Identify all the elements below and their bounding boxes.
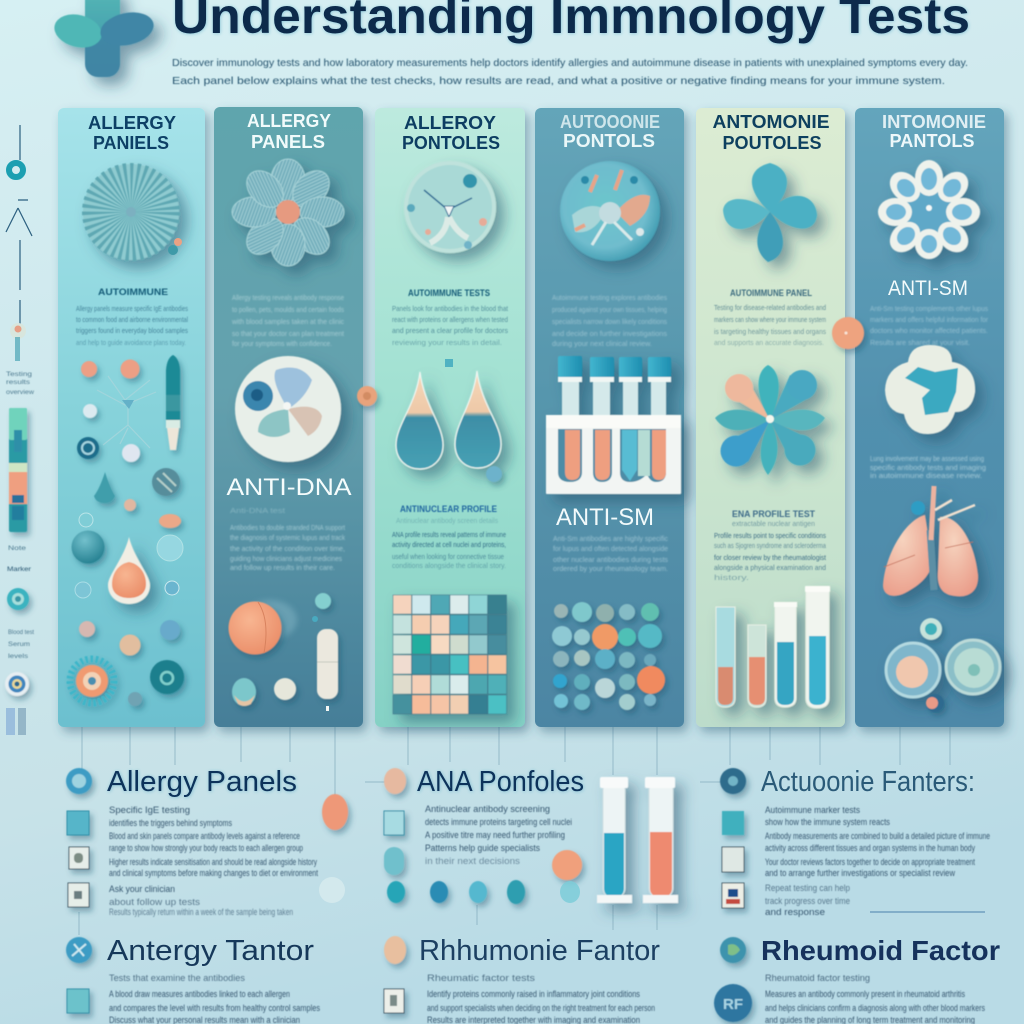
margin notes: Testing (6, 372, 32, 378)
ANA text: Antinuclear antibody screen details (396, 516, 498, 525)
icon tile (67, 989, 89, 1013)
icon tile (384, 989, 404, 1013)
description text: produced against your own tissues, helping (552, 305, 667, 314)
description text (392, 288, 509, 347)
text lines: Identify proteins commonly raised in inflammatory joint conditions (427, 989, 640, 999)
heading: Rheumoid Factor (761, 935, 1000, 966)
text lines: A blood draw measures antibodies linked to each allergen (109, 989, 290, 999)
section: antergy tantor (66, 935, 320, 1024)
description text: reviewing your results in detail. (392, 338, 502, 347)
logo: medical cross (51, 0, 157, 77)
description text: Anti-Sm testing complements other lupus (870, 304, 988, 313)
heading: ANA Ponfoles (417, 766, 584, 798)
text lines: and to arrange further investigations or specialist review (765, 868, 955, 878)
text lines: range to show how strongly your body reacts to each allergen group (109, 843, 303, 853)
icon: small pale cell (920, 618, 942, 640)
heading: PONTOLS (563, 131, 655, 151)
margin notes: overview (6, 390, 35, 396)
margin notes: Note (8, 546, 27, 552)
icon: peach-centred cell (886, 643, 940, 697)
anti-Sm text (553, 534, 668, 573)
marker text: history. (714, 573, 749, 582)
marker text (714, 509, 827, 582)
anti-Sm text: Anti-Sm antibodies are highly specific (553, 534, 668, 543)
icon (66, 937, 92, 963)
organ text (870, 454, 986, 480)
description text: Results are shared at your visit. (870, 338, 970, 347)
orange pill (552, 850, 582, 880)
heading: INTOMONIE (882, 112, 986, 132)
description text: react with proteins or allergens when tested (392, 315, 508, 324)
text lines: Blood and skin panels compare antibody levels against a reference (109, 831, 300, 841)
heading: Rhhumonie Fantor (419, 935, 660, 967)
anti-DNA label: ANTI-DNA (226, 474, 352, 501)
faint bubble (319, 877, 345, 903)
margin notes (6, 372, 35, 660)
anti-DNA text: and follow up results in their care. (230, 563, 335, 572)
intro text block: Each panel below explains what the test checks, how results are read, and what a positive or negative finding means for your immune system. (172, 75, 945, 87)
anti-Sm label: ANTI-SM (888, 277, 968, 300)
marker text: ENA PROFILE TEST (732, 509, 815, 519)
description text: Allergy testing reveals antibody response (232, 293, 344, 302)
heading (247, 111, 331, 152)
icon: anti-DNA disc (235, 356, 341, 462)
text lines: Patterns help guide specialists (425, 843, 540, 853)
icon: four graduated test tubes (716, 586, 830, 708)
heading (402, 113, 500, 153)
ANA text: useful when looking for connective tissue (392, 552, 504, 561)
panel 4: autoimmune pontols (535, 108, 684, 727)
heading (882, 112, 986, 151)
anti-DNA text (230, 506, 346, 572)
small blue blob (486, 466, 502, 482)
section: rheumatoid factor (714, 935, 1000, 1024)
organ text: Lung involvement may be assessed using (870, 454, 984, 463)
section: autoimmune factors (720, 766, 990, 917)
text lines: Repeat testing can help (765, 883, 850, 893)
icon: glossy teal sphere (72, 530, 104, 564)
description text: and present a clear profile for doctors (392, 326, 508, 335)
panel 1: allergy panels (58, 108, 205, 727)
anti-DNA text: Antibodies to double stranded DNA support (230, 523, 346, 532)
icon: blue flower with coral centre (232, 159, 344, 266)
heading: ALLERGY (247, 111, 331, 131)
icon: radial spore (83, 164, 179, 260)
marker text: such as Sjogren syndrome and scleroderma (714, 541, 827, 550)
description text: specialists narrow down likely conditions (552, 317, 667, 326)
icon: neuron sketch (97, 376, 156, 448)
description text: and decide on further investigations (552, 329, 667, 338)
icon: teal cone (94, 472, 115, 503)
section: allergy panels (66, 766, 318, 917)
icon: orange sunburst cell (70, 659, 114, 703)
icon: small vial (10, 323, 26, 361)
icon: white cell with teal star (885, 345, 975, 434)
icon (66, 768, 92, 794)
heading: PANIELS (93, 133, 169, 153)
text lines: and response (765, 907, 825, 917)
icon: dark teal disc (150, 660, 184, 694)
heading: PANTOLS (890, 131, 974, 151)
icon: test tube rack (546, 356, 681, 494)
description text: with blood samples taken at the clinic (231, 317, 344, 326)
anti-DNA text: Anti-DNA test (230, 506, 286, 515)
text lines: and support specialists when deciding on the right treatment for each person (427, 1003, 655, 1013)
icon: target disc (5, 672, 29, 696)
icon: grid of antibody cells (552, 602, 665, 710)
heading: Allergy Panels (107, 766, 297, 798)
margin notes: Serum (8, 642, 30, 648)
blue accent line (870, 911, 985, 913)
text lines (109, 805, 318, 917)
description text: so that your doctor can plan treatment (232, 329, 345, 338)
icon tiles (722, 811, 744, 908)
icon: coral bead (926, 694, 944, 712)
heading: Antergy Tantor (107, 935, 314, 967)
icon tiles (67, 811, 89, 907)
marker text: Profile results point to specific conditions (714, 531, 826, 540)
description text (76, 287, 188, 347)
orange marker between panels 2 and 3 (357, 386, 377, 406)
description text: markers and offers helpful information for (870, 315, 988, 324)
panel 2: allergy panels, anti-dna (214, 107, 363, 727)
ANA text: conditions alongside the clinical story. (392, 561, 506, 570)
panel 3: allergy pontoles (375, 108, 525, 727)
heading: PONTOLES (402, 133, 500, 153)
icon: colour-banded test strip (9, 408, 27, 532)
description text: to common food and airborne environmental (76, 315, 188, 324)
intro text block (172, 57, 968, 87)
heading: ALLERGY (88, 113, 176, 133)
icon (720, 768, 746, 794)
small marker square (445, 359, 453, 367)
ANA text (392, 504, 506, 570)
heading: Actuoonie Fanters: (761, 766, 975, 798)
heading (560, 112, 660, 151)
icon: folded teal clover (723, 163, 817, 262)
description text: doctors who monitor affected patients. (870, 326, 988, 335)
heading: PANELS (251, 132, 325, 152)
text lines: about follow up tests (109, 897, 201, 907)
description text: markers can show where your immune system (714, 315, 826, 324)
text lines: in their next decisions (425, 856, 521, 866)
ANA text: activity directed at cell nuclei and proteins, (392, 540, 506, 549)
description text (552, 293, 667, 348)
icon: crossed lines (6, 125, 32, 325)
text lines: Results typically return within a week of the sample being taken (109, 907, 293, 917)
text lines: show how the immune system reacts (765, 817, 890, 827)
icon: large blue badge: RF (723, 996, 743, 1013)
organ text: in autoimmune disease review. (870, 471, 982, 480)
heading: ANTOMONIE (712, 112, 830, 132)
description text: is targeting healthy tissues and organs (714, 327, 826, 336)
margin notes: Marker (7, 567, 31, 573)
icon: two tall test tubes (597, 777, 678, 903)
icon: teal disc (7, 588, 29, 610)
text lines: identifies the triggers behind symptoms (109, 818, 232, 828)
icon: two drops (396, 371, 501, 469)
text lines (109, 973, 320, 1024)
anti-Sm label: ANTI-SM (556, 504, 654, 531)
margin notes: Blood test (8, 630, 34, 636)
marker text: alongside a physical examination and (714, 563, 826, 572)
description text: during your next clinical review. (552, 339, 652, 348)
ANA text: ANA profile results reveal patterns of immune (392, 530, 506, 539)
text lines (765, 973, 985, 1024)
organ text: specific antibody tests and imaging (870, 463, 986, 472)
description text: Testing for disease-related antibodies and (714, 303, 826, 312)
icon tiles (384, 811, 404, 875)
left margin strip of small icons (5, 125, 35, 735)
text lines: A positive titre may need further profiling (425, 830, 565, 840)
text lines: Higher results indicate sensitisation and should be read alongside history (109, 857, 317, 867)
description text (870, 304, 988, 347)
icon: lungs (883, 486, 978, 596)
description text: Autoimmune testing explores antibodies (552, 293, 667, 302)
text lines (765, 805, 990, 917)
icon: patterned teal disc (560, 161, 660, 261)
description text: AUTOIMMUNE (98, 287, 168, 297)
icon: teal pen (166, 355, 180, 450)
icon: blue and peach petal wheel (715, 365, 825, 475)
intro text block: Discover immunology tests and how laboratory measurements help doctors identify allergies and autoimmune disease in patients with unexplained symptoms every day. (172, 57, 968, 69)
anti-DNA text: guiding how clinicians adjust medicines (230, 554, 342, 563)
teal circle (560, 881, 580, 903)
anti-DNA text: the activity of the condition over time, (230, 544, 345, 553)
description text: for your symptoms with confidence. (232, 339, 332, 348)
ANA text: ANTINUCLEAR PROFILE (400, 504, 497, 514)
anti-Sm text: other nuclear antibodies during tests (553, 555, 668, 564)
description text: Allergy panels measure specific IgE antibodies (76, 304, 188, 313)
text lines: Ask your clinician (109, 884, 175, 894)
icon (384, 936, 406, 964)
section: ANA profiles (66, 766, 1000, 1024)
anti-Sm text: for lupus and often detected alongside (553, 544, 668, 553)
heading: AUTOOONIE (560, 112, 660, 132)
description text: AUTOIMMUNE TESTS (408, 288, 490, 298)
description text: triggers found in everyday blood samples (76, 326, 188, 335)
icon: green-centred cell (946, 640, 1000, 694)
heading: POUTOLES (722, 133, 822, 153)
text lines: and compares the level with results from healthy control samples (109, 1003, 320, 1013)
text lines: Measures an antibody commonly present in rheumatoid arthritis (765, 989, 965, 999)
icon: teal ring (9, 163, 23, 177)
description text: AUTOIMMUNE PANEL (730, 288, 812, 298)
text lines (425, 804, 572, 866)
description text: Panels look for antibodies in the blood that (392, 304, 509, 313)
text lines: and clinical symptoms before making changes to diet or environment (109, 868, 318, 878)
orange marker between panels 5 and 6 (832, 317, 864, 349)
icon: ring of white cells (878, 160, 980, 259)
description text: and help to guide avoidance plans today. (76, 338, 186, 347)
heat-map grid (393, 595, 506, 714)
pills and capsules (228, 593, 338, 711)
section: rhumonie factor (384, 935, 660, 1024)
anti-Sm text: ordered by your rheumatology team. (553, 564, 668, 573)
text lines: Rheumatoid factor testing (765, 973, 870, 983)
icon (720, 937, 746, 963)
margin notes: results (6, 380, 30, 386)
icon: blue strip (6, 708, 26, 735)
text lines: Rheumatic factor tests (427, 973, 536, 983)
row of teal drops (387, 880, 525, 904)
description text (231, 293, 345, 348)
text lines: Autoimmune marker tests (765, 805, 860, 815)
heading: ALLEROY (404, 113, 496, 133)
text lines: track progress over time (765, 896, 850, 906)
heading (88, 113, 176, 153)
connector lines from panels to lower sections (79, 727, 950, 935)
text lines (427, 973, 655, 1024)
panel 5: antomonie poutoles (696, 108, 845, 727)
icon: translucent antibody clock (404, 161, 496, 253)
icon: large blue badge (714, 984, 752, 1022)
panel 6: intomonie pantols (855, 108, 1004, 727)
text lines: detects immune proteins targeting cell nuclei (425, 817, 572, 827)
marker text: extractable nuclear antigen (732, 519, 815, 528)
allergen icons (70, 355, 184, 706)
marker text: for closer review by the rheumatologist (714, 553, 827, 562)
orange capsule marker (322, 794, 348, 830)
icon: orange drop (108, 537, 150, 604)
text lines: Antinuclear antibody screening (425, 804, 550, 814)
description text (714, 288, 826, 347)
description text: to pollen, pets, moulds and certain foods (232, 305, 344, 314)
text lines: Tests that examine the antibodies (109, 973, 245, 983)
anti-DNA text: the diagnosis of systemic lupus and track (230, 533, 345, 542)
margin notes: levels (8, 654, 28, 660)
description text: and supports an accurate diagnosis. (714, 338, 824, 347)
icon (384, 768, 406, 794)
text lines: Specific IgE testing (109, 805, 190, 815)
heading (712, 112, 830, 153)
icon: spore satellites (168, 238, 182, 255)
